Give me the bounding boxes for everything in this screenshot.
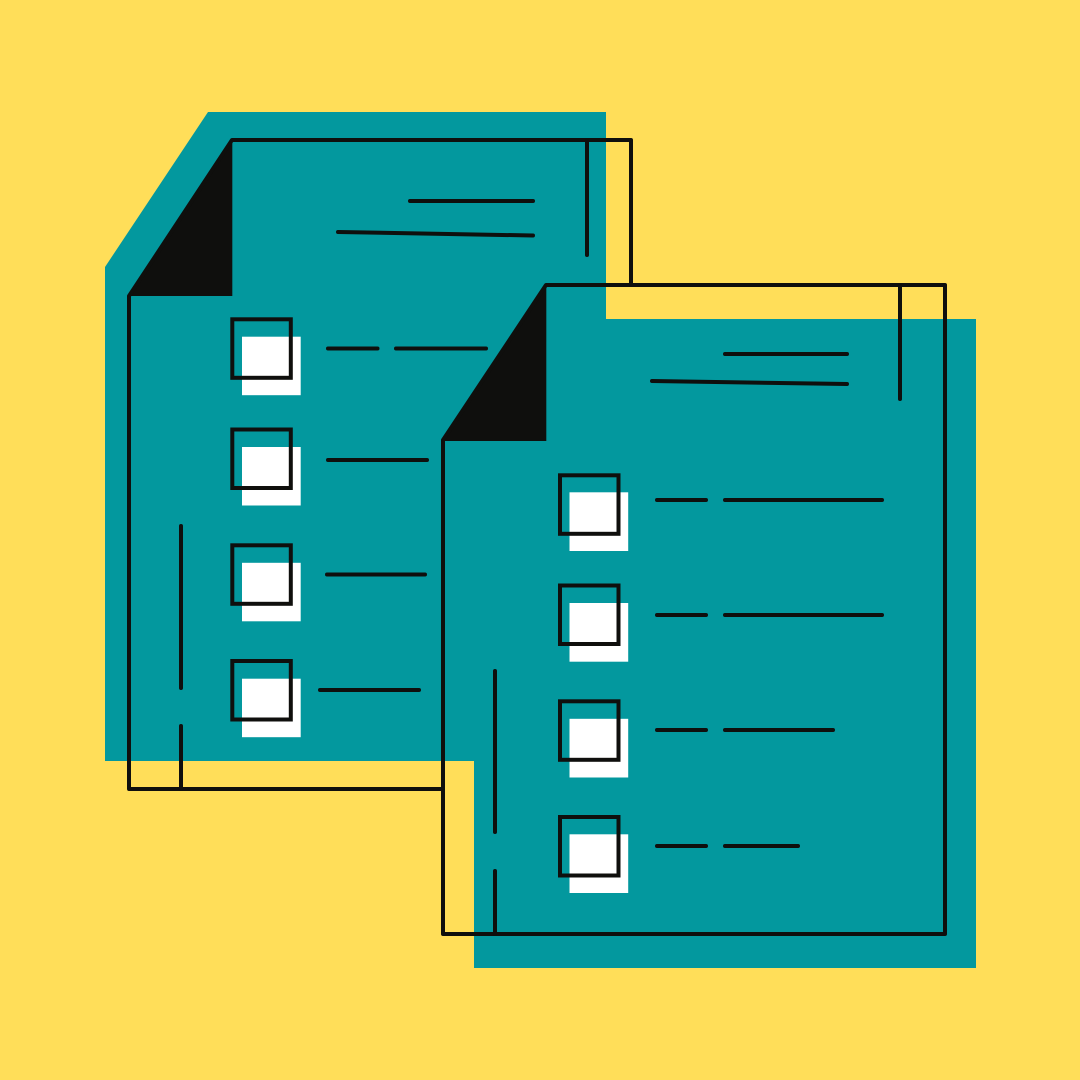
teal paper shape: both documents [105,112,976,968]
document: left [128,139,631,789]
header lines: right [652,286,900,399]
document: right [442,284,945,934]
checklist row 2: left [232,430,427,506]
checklist row 4: left [232,661,419,737]
outline: right [443,285,945,934]
checklist row 3: left [232,545,425,621]
checklist row 1: right [560,475,882,551]
folded corner: right [442,284,546,441]
margin lines: right [493,671,497,934]
margin lines: left [179,526,183,789]
outline: left [129,140,631,789]
checklist row 2: right [560,586,882,662]
checklist row 4: right [560,817,798,893]
folded corner: left [128,139,232,296]
checklist row 3: right [560,701,833,778]
header lines: left [338,141,587,255]
checklist row 1: left [232,319,486,395]
